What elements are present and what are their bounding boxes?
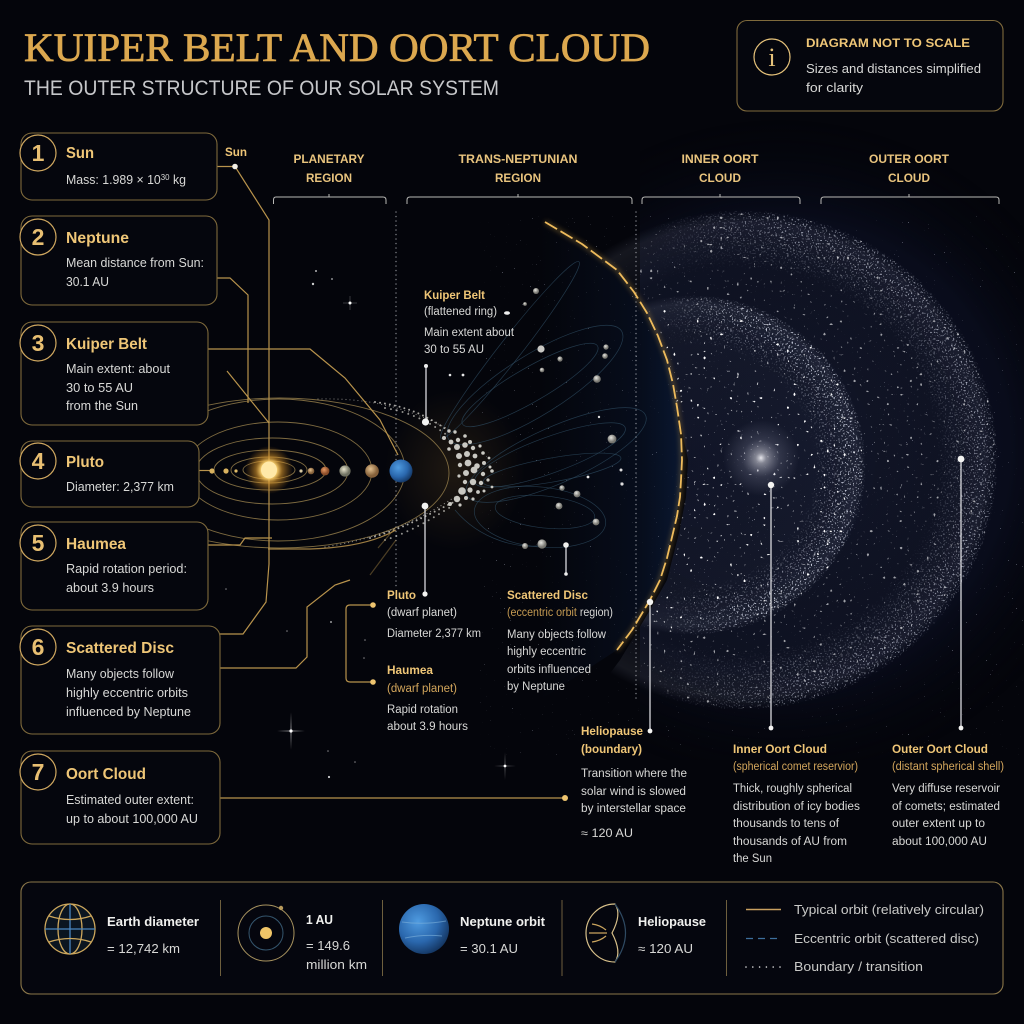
inner Oort dense core bbox=[723, 420, 799, 496]
callout: Haumea: Haumea bbox=[387, 663, 433, 677]
callout: Kuiper Belt: 30 to 55 AU bbox=[424, 344, 484, 356]
panel: 5 Haumea bbox=[20, 522, 208, 610]
Heliopause text: ≈ 120 AU bbox=[638, 942, 693, 956]
panel: 4 Pluto bbox=[20, 441, 199, 507]
icon: Neptune bbox=[390, 460, 412, 482]
Earth diameter text: = 12,742 km bbox=[107, 942, 180, 956]
icon: 1 AU orbit bbox=[238, 905, 294, 961]
callout: Heliopause: (boundary) bbox=[581, 742, 642, 756]
heading: trans-neptunian region bbox=[407, 152, 632, 204]
panel: 2 Neptune: Mean distance from Sun: bbox=[66, 256, 204, 270]
heading: planetary region bbox=[274, 152, 386, 204]
heading: outer oort cloud: OUTER OORT bbox=[869, 152, 950, 166]
outer Oort cloud shell bbox=[602, 210, 998, 709]
panel: 2 Neptune bbox=[20, 216, 217, 305]
1 AU text bbox=[306, 912, 367, 972]
1 AU text: 1 AU bbox=[306, 912, 333, 927]
panel: 4 Pluto: 4 bbox=[32, 448, 45, 474]
panel: reference scale strip bbox=[21, 882, 1003, 994]
heading: trans-neptunian region: REGION bbox=[495, 171, 541, 185]
panel: 7 Oort Cloud: up to about 100,000 AU bbox=[66, 812, 198, 826]
panel: not to scale notice: DIAGRAM NOT TO SCALE bbox=[806, 36, 970, 50]
panel: 6 Scattered Disc bbox=[20, 626, 220, 734]
Sun pointer label bbox=[225, 145, 247, 169]
callout: Kuiper Belt: Kuiper Belt bbox=[424, 288, 485, 302]
subtitle: THE OUTER STRUCTURE OF OUR SOLAR SYSTEM bbox=[24, 77, 499, 100]
panel: not to scale notice: for clarity bbox=[806, 81, 864, 95]
heading: inner oort cloud: CLOUD bbox=[699, 171, 741, 185]
callout: Inner Oort Cloud: the Sun bbox=[733, 853, 772, 865]
panel: 6 Scattered Disc: influenced by Neptune bbox=[66, 705, 191, 719]
heliosphere navy interior bbox=[540, 218, 682, 700]
glint stars bbox=[225, 270, 516, 780]
Neptune orbit text: = 30.1 AU bbox=[460, 942, 518, 956]
panel: 3 Kuiper Belt: Main extent: about bbox=[66, 362, 171, 376]
panel: 2 Neptune: 2 bbox=[32, 224, 44, 250]
callout: Outer Oort Cloud bbox=[892, 456, 1004, 848]
background star speckle bbox=[480, 215, 1024, 755]
Earth diameter text bbox=[107, 914, 199, 956]
panel: 3 Kuiper Belt: from the Sun bbox=[66, 399, 138, 413]
connector lines bbox=[199, 166, 565, 798]
callout: Inner Oort Cloud: distribution of icy bodies bbox=[733, 801, 860, 813]
panel: 6 Scattered Disc: highly eccentric orbits bbox=[66, 686, 188, 700]
panel: 3 Kuiper Belt: Kuiper Belt bbox=[66, 336, 147, 353]
callout: Heliopause: ≈ 120 AU bbox=[581, 828, 633, 840]
panel: 4 Pluto: Diameter: 2,377 km bbox=[66, 480, 174, 494]
callout: Outer Oort Cloud: about 100,000 AU bbox=[892, 836, 987, 848]
callout: Inner Oort Cloud bbox=[733, 482, 860, 865]
heading: outer oort cloud bbox=[821, 152, 999, 204]
scattered disc objects bbox=[504, 288, 624, 549]
callout: Inner Oort Cloud: Inner Oort Cloud bbox=[733, 742, 827, 756]
Kuiper belt dotted bands bbox=[318, 399, 458, 547]
scattered disc eccentric orbits bbox=[432, 255, 657, 554]
panel: 7 Oort Cloud: Estimated outer extent: bbox=[66, 793, 194, 807]
sun glow and body bbox=[245, 446, 293, 494]
panel: 3 Kuiper Belt: 30 to 55 AU bbox=[66, 381, 133, 395]
callout: Scattered Disc: Scattered Disc bbox=[507, 588, 588, 602]
callout: Outer Oort Cloud: outer extent up to bbox=[892, 818, 985, 830]
panel: 3 Kuiper Belt: 3 bbox=[32, 330, 44, 356]
callout: Haumea: Rapid rotation bbox=[387, 704, 458, 716]
1 AU text: = 149.6 bbox=[306, 939, 350, 953]
panel: 5 Haumea: Haumea bbox=[66, 536, 126, 553]
callout: Haumea: (dwarf planet) bbox=[387, 683, 457, 695]
title: KUIPER BELT AND OORT CLOUD bbox=[24, 25, 650, 70]
Heliopause text bbox=[638, 914, 706, 956]
panel: 1 Sun: kg bbox=[170, 173, 186, 187]
panel: 5 Haumea: Rapid rotation period: bbox=[66, 562, 187, 576]
1 AU text: million km bbox=[306, 958, 367, 972]
legend: Boundary / transition bbox=[794, 960, 923, 974]
legend: Eccentric orbit (scattered disc) bbox=[794, 932, 979, 946]
heading: trans-neptunian region: TRANS-NEPTUNIAN bbox=[458, 152, 578, 166]
planetary orbits bbox=[197, 398, 450, 548]
callout: Scattered Disc: highly eccentric bbox=[507, 646, 586, 658]
callout: Outer Oort Cloud: Outer Oort Cloud bbox=[892, 742, 988, 756]
callout: Haumea bbox=[370, 663, 468, 733]
callout: Heliopause bbox=[562, 599, 687, 840]
heading: outer oort cloud: CLOUD bbox=[888, 171, 930, 185]
callout: Inner Oort Cloud: thousands to tens of bbox=[733, 818, 840, 830]
Kuiper belt rocks bbox=[442, 429, 494, 507]
callout: Heliopause: Heliopause bbox=[581, 724, 643, 738]
inner Oort cloud shell bbox=[642, 296, 866, 634]
panel: 5 Haumea: 5 bbox=[32, 530, 45, 556]
panel: not to scale notice: Sizes and distances simplified bbox=[806, 62, 981, 76]
icon: heliopause bbox=[586, 904, 626, 962]
icon: Earth globe bbox=[45, 904, 95, 954]
legend: Typical orbit (relatively circular) bbox=[794, 903, 984, 917]
icon: Neptune sphere bbox=[399, 904, 449, 954]
heliopause dashed boundary bbox=[545, 222, 682, 650]
panel: 1 Sun: Sun bbox=[66, 145, 94, 162]
callout: Inner Oort Cloud: Thick, roughly spherical bbox=[733, 783, 852, 795]
callout: Scattered Disc: orbits influenced bbox=[507, 664, 591, 676]
callout: Outer Oort Cloud: (distant spherical shell) bbox=[892, 761, 1004, 773]
panel: 7 Oort Cloud: 7 bbox=[32, 759, 44, 785]
callout: Haumea: about 3.9 hours bbox=[387, 721, 468, 733]
vertical boundary dotted lines bbox=[396, 212, 636, 702]
panel: 5 Haumea: about 3.9 hours bbox=[66, 581, 154, 595]
heading: inner oort cloud: INNER OORT bbox=[682, 152, 759, 166]
panel: 1 Sun: 1 bbox=[32, 140, 45, 166]
panel: not to scale notice bbox=[737, 20, 1003, 111]
panel: 6 Scattered Disc: Many objects follow bbox=[66, 667, 175, 681]
callout: Kuiper Belt: (flattened ring) bbox=[424, 306, 497, 318]
panel: 7 Oort Cloud: Oort Cloud bbox=[66, 766, 146, 783]
legend bbox=[746, 903, 984, 974]
panel: 1 Sun bbox=[20, 133, 217, 200]
panel: 4 Pluto: Pluto bbox=[66, 454, 104, 471]
heading: inner oort cloud bbox=[642, 152, 800, 204]
callout: Outer Oort Cloud: of comets; estimated bbox=[892, 801, 1000, 813]
callout: Outer Oort Cloud: Very diffuse reservoir bbox=[892, 783, 1000, 795]
callout: Inner Oort Cloud: thousands of AU from bbox=[733, 836, 847, 848]
heading: planetary region: PLANETARY bbox=[294, 152, 364, 166]
Neptune orbit text bbox=[460, 914, 546, 956]
Neptune orbit text: Neptune orbit bbox=[460, 914, 546, 929]
panel: 6 Scattered Disc: Scattered Disc bbox=[66, 640, 174, 657]
callout: Scattered Disc: Many objects follow bbox=[507, 629, 607, 641]
panel: 2 Neptune: Neptune bbox=[66, 230, 129, 247]
callout: Kuiper Belt bbox=[422, 288, 515, 426]
heading: planetary region: REGION bbox=[306, 171, 352, 185]
panel: 6 Scattered Disc: 6 bbox=[32, 634, 44, 660]
callout: Heliopause: solar wind is slowed bbox=[581, 786, 686, 798]
callout: Pluto: (dwarf planet) bbox=[387, 607, 457, 619]
panel: 7 Oort Cloud bbox=[20, 751, 220, 844]
panel: 2 Neptune: 30.1 AU bbox=[66, 275, 109, 289]
Sun pointer label: Sun bbox=[225, 145, 247, 159]
panel: 1 Sun: Mass: 1.989 × 10 bbox=[66, 173, 162, 187]
callout: Pluto: Diameter 2,377 km bbox=[387, 628, 481, 640]
callout: Inner Oort Cloud: (spherical comet reservior) bbox=[733, 761, 858, 773]
callout: Heliopause: by interstellar space bbox=[581, 803, 686, 815]
Heliopause text: Heliopause bbox=[638, 914, 706, 929]
Earth diameter text: Earth diameter bbox=[107, 914, 199, 929]
panel: 3 Kuiper Belt bbox=[20, 322, 208, 425]
callout: Heliopause: Transition where the bbox=[581, 768, 687, 780]
callout: Kuiper Belt: Main extent about bbox=[424, 327, 515, 339]
panel: not to scale notice: i bbox=[768, 43, 776, 72]
callout: Scattered Disc: (eccentric orbit region) bbox=[507, 607, 613, 619]
callout: Pluto bbox=[370, 503, 481, 640]
callout: Scattered Disc bbox=[507, 542, 613, 693]
planets row bbox=[209, 464, 379, 478]
panel: 1 Sun: 30 bbox=[161, 173, 170, 182]
background bbox=[406, 191, 1024, 710]
callout: Scattered Disc: by Neptune bbox=[507, 681, 565, 693]
callout: Pluto: Pluto bbox=[387, 588, 416, 602]
